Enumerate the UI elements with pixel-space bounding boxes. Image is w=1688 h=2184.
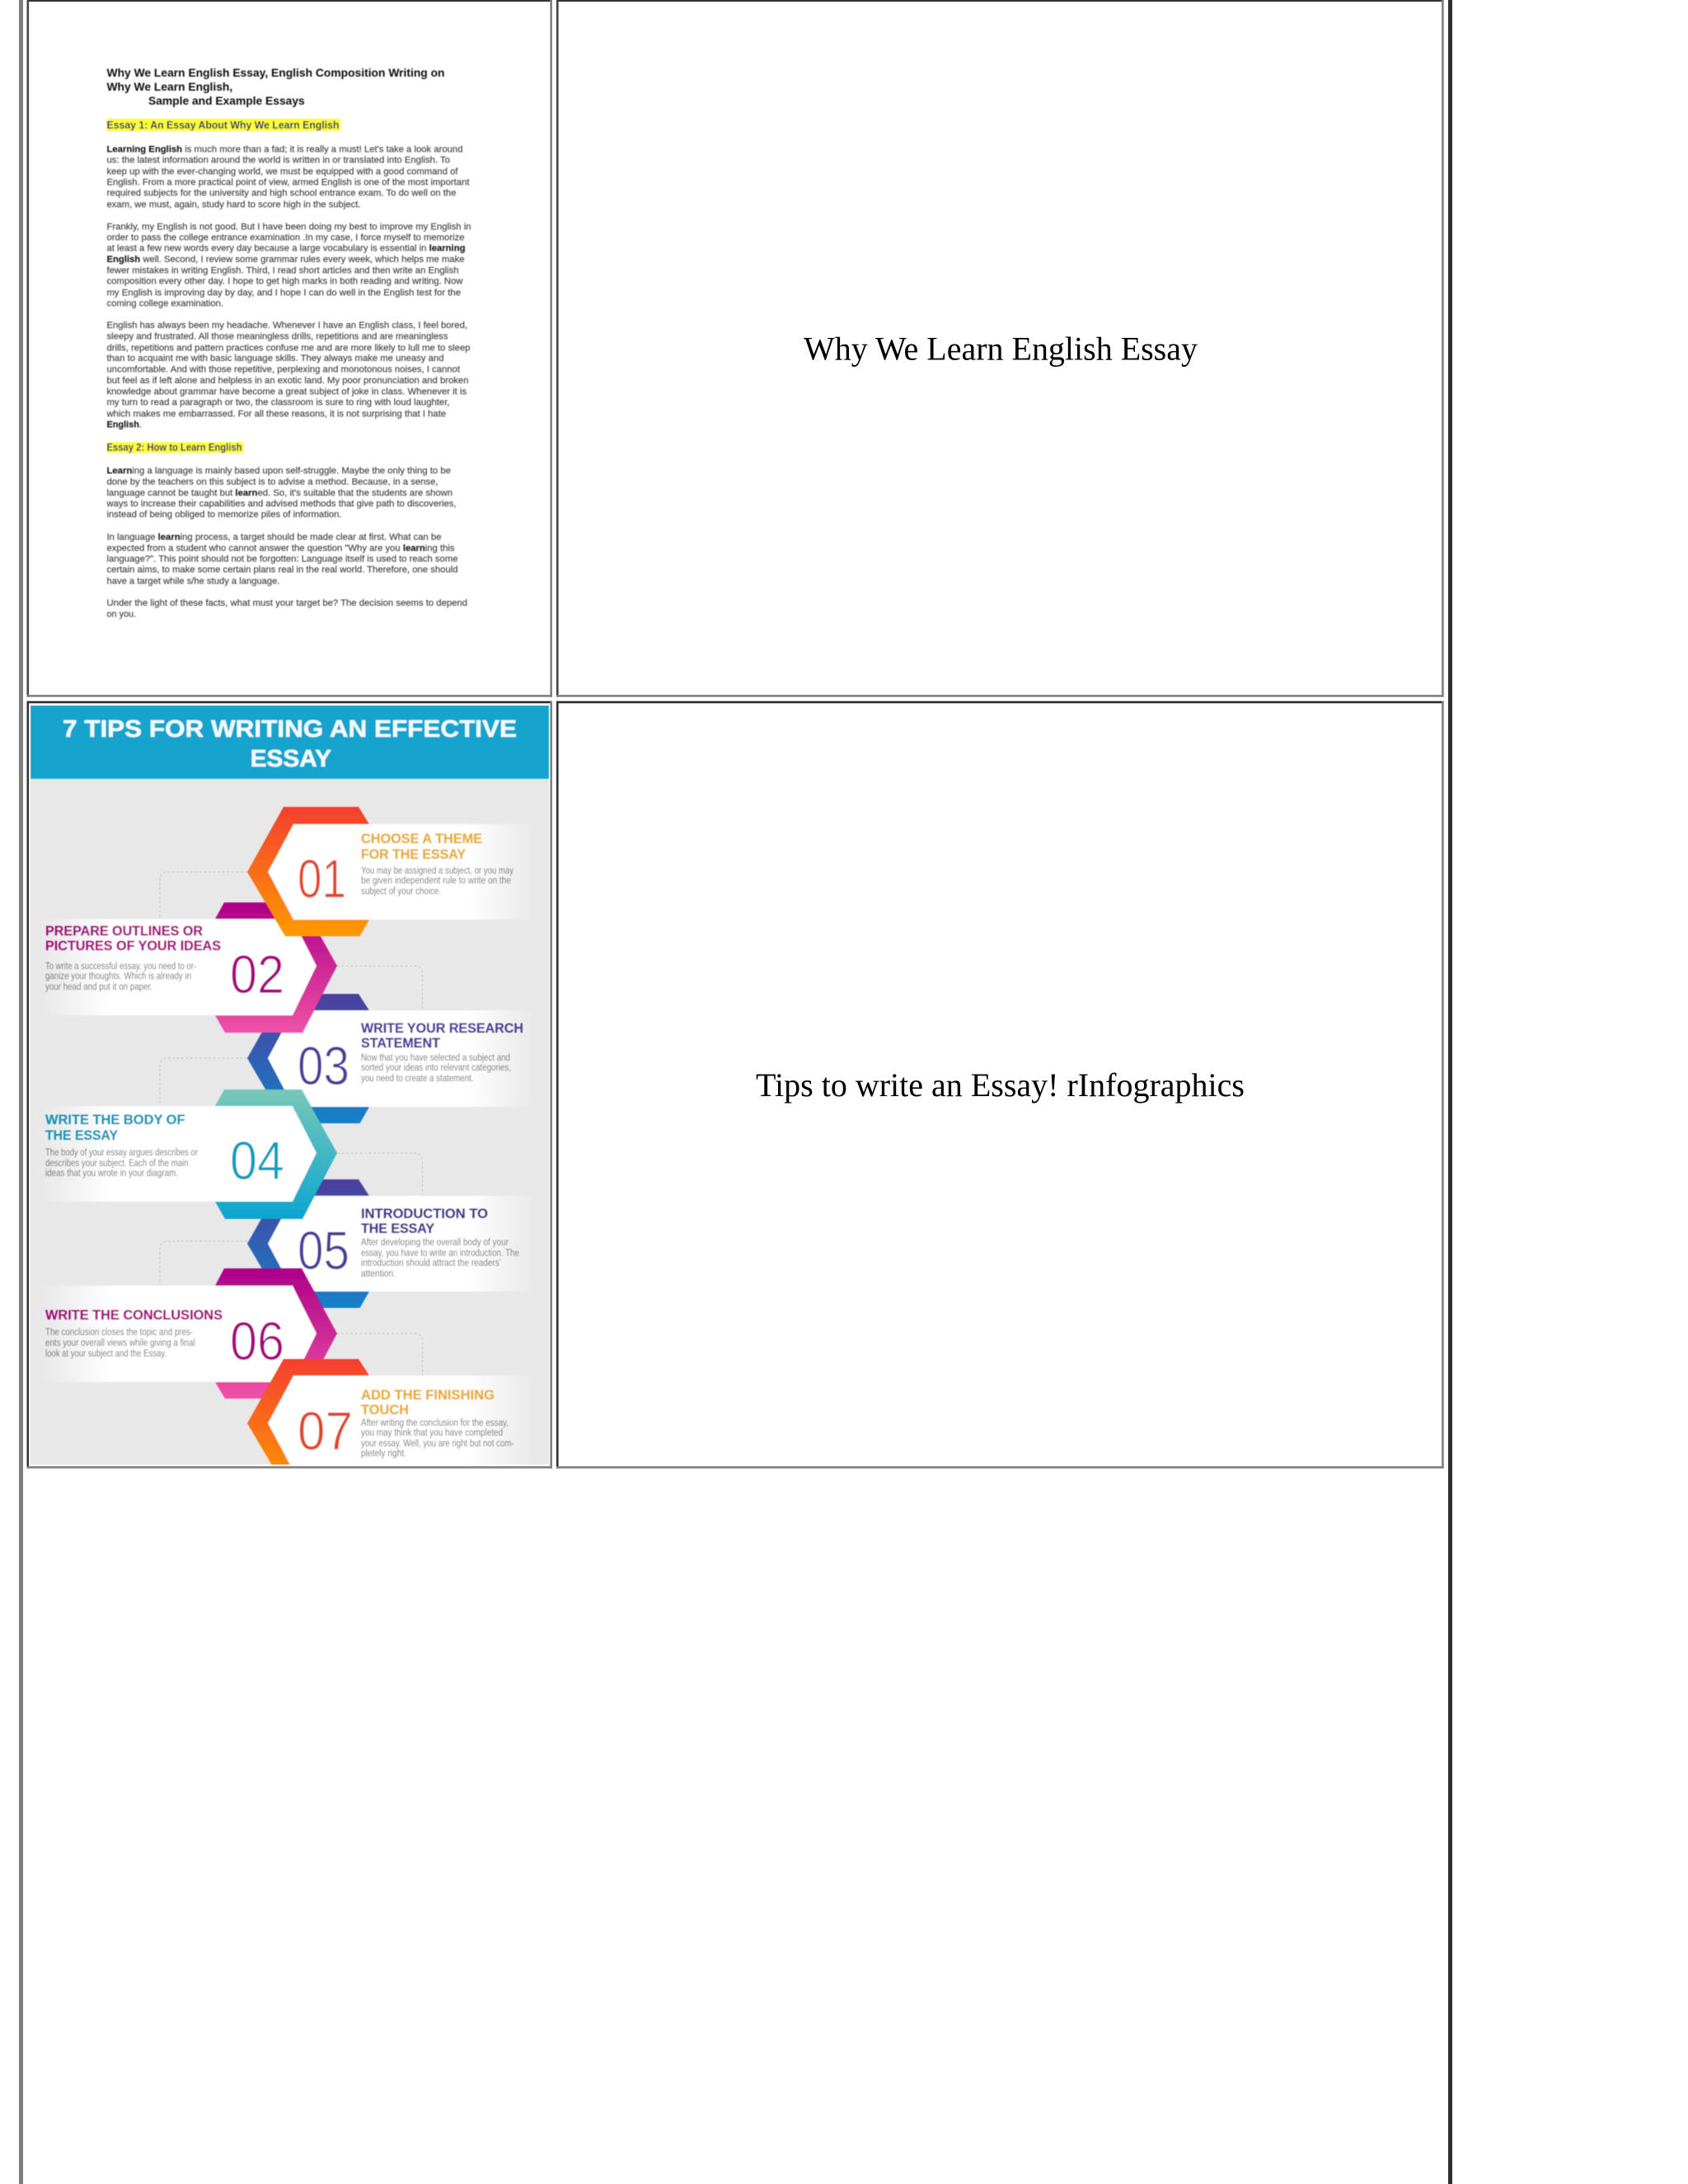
essay 2 paragraph 3: Under the light of these facts, what must your target be? The decision seems to depend	[107, 598, 467, 608]
step 05: INTRODUCTION TO	[361, 1206, 488, 1221]
essay 1 paragraph 3	[106, 321, 470, 430]
essay 2 paragraph 3: on you.	[107, 609, 136, 619]
essay 1 paragraph 2: my English is improving day by day, and I hope I can do well in the English test for the	[107, 288, 461, 298]
step 03: Now that you have selected a subject and	[361, 1052, 510, 1063]
essay 1 paragraph 3: English.	[107, 420, 142, 430]
step 07: you may think that you have completed	[361, 1427, 503, 1438]
dashed connectors	[160, 872, 422, 1376]
step 01: 01	[298, 848, 346, 909]
essay 1 paragraph 2: English well. Second, I review some grammar rules every week, which helps me make	[107, 255, 465, 265]
essay 1 paragraph 3: knowledge about grammar have become a great subject of joke in class. Whenever it is	[107, 387, 467, 397]
essay 1 paragraph 3: uncomfortable. And with those repetitive, perplexing and monotonous noises, I cannot	[107, 365, 461, 375]
step 07: After writing the conclusion for the essay,	[361, 1417, 509, 1428]
essay 1 paragraph 3: but feel as if left alone and helpless in an exotic land. My poor pronunciation and broken	[107, 376, 468, 386]
step 06: ents your overall views while giving a final	[45, 1337, 195, 1348]
step 03: 03	[298, 1035, 349, 1096]
essay 1 paragraph 1: us: the latest information around the world is written in or translated into English. To	[107, 156, 450, 166]
step 01: CHOOSE A THEME	[361, 831, 482, 846]
step 04: ideas that you wrote in your diagram.	[45, 1167, 178, 1179]
essay 1 paragraph 3: my turn to read a paragraph or two, the classroom is sure to ring with loud laughter,	[107, 398, 450, 408]
step 02: 02	[230, 944, 284, 1005]
step 02: PICTURES OF YOUR IDEAS	[45, 938, 221, 954]
step 02: PREPARE OUTLINES OR	[45, 923, 203, 939]
step 02: ganize your thoughts. Which is already in	[45, 970, 191, 982]
cell frame: top left	[26, 0, 552, 697]
caption: bottom right cell: Tips to write an Essay! rInfographics	[756, 1066, 1245, 1104]
step 04: THE ESSAY	[45, 1127, 119, 1143]
step 03	[247, 994, 536, 1123]
essay 1 paragraph 2	[107, 222, 471, 308]
essay 2 paragraph 2	[107, 532, 458, 586]
step 07: your essay. Well, you are right but not com-	[361, 1437, 514, 1449]
infographic header band: 7 TIPS FOR WRITING AN EFFECTIVE	[63, 716, 517, 743]
step 03: WRITE YOUR RESEARCH	[361, 1020, 523, 1036]
step 05	[247, 1179, 536, 1308]
essay 1 paragraph 1	[107, 145, 470, 209]
cell frame: top right	[556, 0, 1444, 697]
step 02	[41, 902, 337, 1033]
step 04: The body of your essay argues describes or	[45, 1146, 198, 1158]
step 06	[41, 1268, 337, 1399]
essay 2 paragraph 1: done by the teachers on this subject is to advise a method. Because, in a sense,	[107, 477, 438, 487]
step 05: After developing the overall body of your	[361, 1236, 509, 1248]
essay main heading	[107, 67, 445, 107]
essay main heading: Why We Learn English,	[107, 81, 232, 93]
essay 1 paragraph 3: English has always been my headache. Whenever I have an English class, I feel bored,	[107, 321, 467, 330]
essay 2 paragraph 2: expected from a student who cannot answer the question "Why are you learning this	[107, 543, 455, 553]
essay 1 paragraph 3: sleepy and frustrated. All those meaningless drills, repetitions and are meaningless	[107, 332, 448, 342]
highlighted heading: essay 2: Essay 2: How to Learn English	[107, 442, 242, 453]
step 06: look at your subject and the Essay.	[45, 1347, 166, 1359]
infographic panel: 7 tips	[30, 705, 549, 1488]
step 04	[41, 1090, 337, 1219]
essay main heading: Why We Learn English Essay, English Composition Writing on	[107, 67, 445, 79]
essay 1 paragraph 2: coming college examination.	[107, 298, 223, 308]
step 03: you need to create a statement.	[361, 1072, 473, 1084]
infographic background	[30, 779, 549, 1465]
step 07	[246, 1358, 514, 1465]
essay 1 paragraph 1: Learning English is much more than a fad; it is really a must! Let's take a look around	[107, 145, 463, 155]
step 07: 07	[298, 1400, 353, 1461]
essay 1 paragraph 2: order to pass the college entrance examination .In my case, I force myself to memorize	[107, 232, 465, 242]
essay screenshot panel	[106, 67, 471, 619]
step 01: You may be assigned a subject, or you may	[361, 865, 514, 876]
essay 1 paragraph 2: at least a few new words every day because a large vocabulary is essential in learning	[107, 244, 466, 254]
step 04: 04	[230, 1130, 284, 1191]
essay 1 paragraph 1: required subjects for the university and high school entrance exam. To do well on the	[107, 189, 457, 199]
step 01: FOR THE ESSAY	[361, 846, 467, 862]
step 06: The conclusion closes the topic and pres-	[45, 1326, 193, 1338]
infographic header band	[30, 705, 549, 779]
step 03: sorted your ideas into relevant categories,	[361, 1062, 511, 1073]
step 04: WRITE THE BODY OF	[45, 1112, 185, 1127]
infographic header band: ESSAY	[251, 746, 331, 772]
step 06: 06	[230, 1310, 284, 1371]
essay 1 paragraph 3: which makes me embarrassed. For all these reasons, it is not surprising that I hate	[106, 409, 446, 419]
step 04: describes your subject. Each of the main	[45, 1157, 189, 1169]
essay 2 paragraph 1: ways to increase their capabilities and advised methods that give path to discoveries,	[106, 499, 457, 509]
step 05: 05	[298, 1220, 349, 1281]
step 01	[247, 807, 536, 936]
essay 1 paragraph 2: Frankly, my English is not good. But I have been doing my best to improve my English in	[107, 222, 471, 232]
step 05: introduction should attract the readers'	[361, 1257, 501, 1268]
essay 2 paragraph 1: Learning a language is mainly based upon self-struggle. Maybe the only thing to be	[107, 466, 451, 476]
essay 1 paragraph 2: fewer mistakes in writing English. Third, I read short articles and then write an English	[107, 265, 458, 275]
highlighted heading: essay 1: Essay 1: An Essay About Why We Learn English	[107, 120, 340, 131]
essay 2 paragraph 1: instead of being obliged to memorize piles of information.	[107, 510, 341, 520]
essay main heading: Sample and Example Essays	[148, 95, 305, 107]
step 07: ADD THE FINISHING	[361, 1387, 495, 1403]
essay 2 paragraph 2: In language learning process, a target should be made clear at first. What can be	[107, 532, 442, 542]
essay 1 paragraph 1: exam, we must, again, study hard to score high in the subject.	[107, 199, 361, 209]
step 07: TOUCH	[361, 1402, 409, 1418]
essay 2 paragraph 3	[107, 598, 467, 619]
essay 1 paragraph 1: English. From a more practical point of view, armed English is one of the most important	[107, 178, 470, 188]
essay 1 paragraph 3: than to acquaint me with basic language skills. They always make me uneasy and	[107, 354, 443, 363]
step 05: THE ESSAY	[361, 1221, 435, 1236]
step 02: To write a successful essay, you need to or-	[45, 960, 196, 972]
essay 2 paragraph 2: language?". This point should not be forgotten: Language itself is used to reach some	[107, 554, 458, 564]
essay 2 paragraph 2: certain aims, to make some certain plans real in the real world. Therefore, one should	[107, 565, 458, 575]
step 03: STATEMENT	[361, 1035, 441, 1051]
step 07: pletely right.	[361, 1447, 406, 1459]
essay 2 paragraph 1: language cannot be taught but learned. So, it's suitable that the students are shown	[107, 488, 452, 498]
caption: top right cell: Why We Learn English Essay	[804, 330, 1198, 368]
step 05: attention.	[361, 1268, 396, 1279]
cell frame: bottom right	[556, 701, 1444, 1469]
essay 2 paragraph 2: have a target while s/he study a language.	[107, 576, 280, 586]
essay 1 paragraph 1: keep up with the ever-changing world, we must be equipped with a good command of	[107, 166, 458, 176]
step 01: subject of your choice.	[361, 885, 441, 897]
step 01: be given independent rule to write on the	[361, 874, 511, 886]
step 06: WRITE THE CONCLUSIONS	[45, 1307, 223, 1323]
cell frame: bottom left	[26, 701, 552, 1469]
essay 1 paragraph 2: composition every other day. I hope to get high marks in both reading and writing. Now	[107, 277, 463, 287]
step 02: your head and put it on paper.	[45, 981, 152, 992]
essay 1 paragraph 3: drills, repetitions and pattern practices confuse me and are more likely to lull me to sleep	[107, 343, 470, 353]
essay 2 paragraph 1	[106, 466, 457, 520]
step 05: essay, you have to write an introduction. The	[361, 1247, 519, 1258]
